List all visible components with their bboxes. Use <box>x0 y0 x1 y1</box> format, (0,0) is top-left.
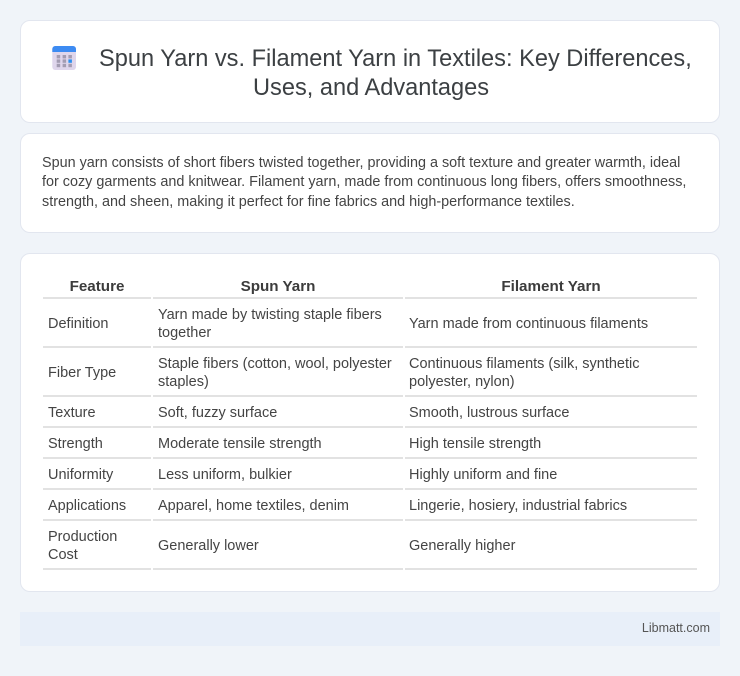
row: Texture: Texture <box>48 405 96 421</box>
row: Uniformity: Less uniform, bulkier <box>158 467 292 483</box>
header panel <box>20 20 720 123</box>
intro text: strength, and sheen, making it perfect for fine fabrics and high-performance textiles. <box>42 194 575 210</box>
table header row: Spun Yarn <box>241 278 315 295</box>
row: Fiber Type: Fiber Type <box>48 365 116 381</box>
row: Production Cost <box>48 529 516 563</box>
row: Definition <box>48 307 648 341</box>
row: Strength <box>48 436 541 452</box>
comparison table <box>43 278 697 570</box>
row: Fiber Type: staples) <box>158 374 209 390</box>
row: Production Cost: Cost <box>48 547 78 563</box>
row: Definition: together <box>158 325 211 341</box>
row: Applications: Apparel, home textiles, denim <box>158 498 349 514</box>
row: Uniformity: Highly uniform and fine <box>409 467 557 483</box>
row: Texture: Smooth, lustrous surface <box>409 405 569 421</box>
title <box>99 46 692 101</box>
row: Fiber Type: polyester, nylon) <box>409 374 515 390</box>
row: Production Cost: Generally higher <box>409 538 515 554</box>
title: Uses, and Advantages <box>253 75 489 101</box>
title: Spun Yarn vs. Filament Yarn in Textiles: Key Differences, <box>99 46 692 72</box>
row: Strength: Moderate tensile strength <box>158 436 322 452</box>
icon: calendar grid <box>52 46 76 70</box>
row: Definition: Definition <box>48 316 108 332</box>
intro text: for cozy garments and knitwear. Filament yarn, made from continuous long fibers, offers smoothness, <box>42 174 686 190</box>
row: Definition: Yarn made by twisting staple fibers <box>158 307 382 323</box>
row: Fiber Type: Staple fibers (cotton, wool, polyester <box>158 356 392 372</box>
row: Definition: Yarn made from continuous filaments <box>409 316 648 332</box>
intro panel <box>20 133 720 233</box>
row: Fiber Type: Continuous filaments (silk, synthetic <box>409 356 640 372</box>
row: Fiber Type <box>48 356 640 390</box>
row: Applications: Lingerie, hosiery, industrial fabrics <box>409 498 627 514</box>
row: Uniformity: Uniformity <box>48 467 113 483</box>
comparison table panel <box>20 253 720 592</box>
row: Applications <box>48 498 627 514</box>
row: Strength: High tensile strength <box>409 436 541 452</box>
table header row: Feature <box>70 278 124 295</box>
row: Production Cost: Generally lower <box>158 538 259 554</box>
row: Texture <box>48 405 569 421</box>
row: Strength: Strength <box>48 436 103 452</box>
row: Production Cost: Production <box>48 529 117 545</box>
intro text: Spun yarn consists of short fibers twisted together, providing a soft texture and greater warmth, ideal <box>42 155 680 171</box>
row: Texture: Soft, fuzzy surface <box>158 405 277 421</box>
intro text <box>42 155 686 210</box>
footer bar <box>20 612 720 646</box>
row: Uniformity <box>48 467 557 483</box>
footer text: Libmatt.com <box>642 621 710 635</box>
row: Applications: Applications <box>48 498 126 514</box>
table header row: Filament Yarn <box>501 278 601 295</box>
table header row <box>70 278 601 295</box>
